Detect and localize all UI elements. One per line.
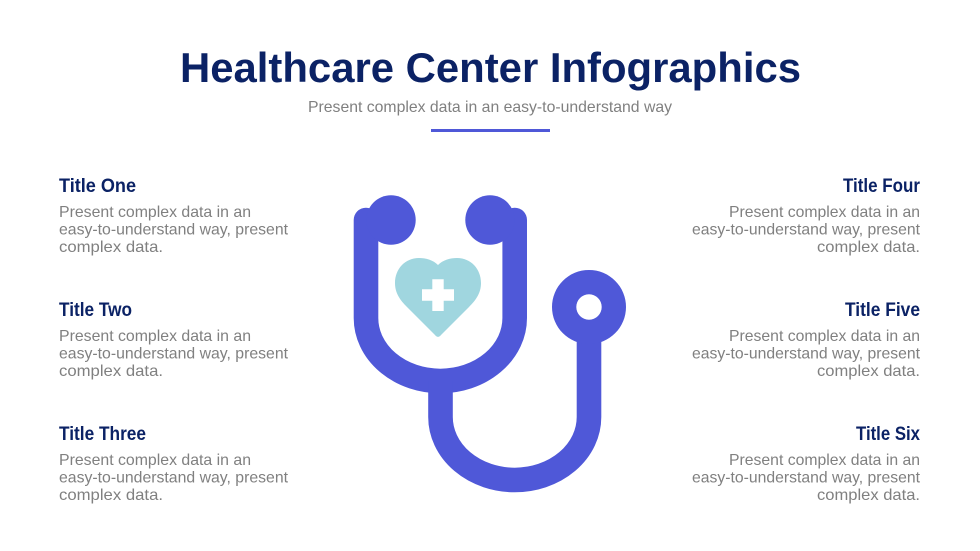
text block: Title Two: Present complex data in an [59, 328, 251, 345]
text block: Title Three: complex data. [59, 487, 163, 504]
icon: heart with cross [395, 258, 481, 337]
text block: Title Two: complex data. [59, 363, 163, 380]
chest piece [552, 270, 626, 344]
text block: Title Six: complex data. [817, 487, 920, 504]
text block: Title One: complex data. [59, 239, 163, 256]
text block: Title Four: Present complex data in an [729, 204, 920, 221]
right ear tip [465, 195, 515, 245]
text block: Title Five [692, 300, 921, 380]
text block: Title Three: Present complex data in an [59, 452, 251, 469]
text block: Title Six: Title Six [856, 424, 920, 445]
text block: Title Three [59, 424, 289, 504]
headset tube [366, 220, 515, 381]
text block: Title Five: Present complex data in an [729, 328, 920, 345]
text block: Title Six [692, 424, 921, 504]
text block: Title Two: Title Two [59, 300, 132, 321]
title underline [431, 129, 550, 132]
text block: Title One: Present complex data in an [59, 204, 251, 221]
text block: Title Four [692, 176, 921, 256]
text block: Title Three: Title Three [59, 424, 146, 445]
text block: Title Six: Present complex data in an [729, 452, 920, 469]
text block: Title Four: complex data. [817, 239, 920, 256]
text block: Title One: Title One [59, 176, 136, 197]
icon: stethoscope [366, 195, 626, 480]
text block: Title Four: Title Four [843, 176, 921, 197]
text block: Title Two [59, 300, 289, 380]
text block: Title Four: easy-to-understand way, present [692, 222, 921, 238]
text block: Title One [59, 176, 289, 256]
text block: Title Five: complex data. [817, 363, 920, 380]
subtitle: Present complex data in an easy-to-understand way [308, 99, 672, 116]
lower tube [440, 335, 589, 480]
left ear tip [366, 195, 416, 245]
title: Healthcare Center Infographics [180, 44, 801, 91]
text block: Title Five: Title Five [845, 300, 920, 321]
text block: Title Five: easy-to-understand way, present [692, 346, 921, 362]
text block: Title Two: easy-to-understand way, present [59, 346, 289, 362]
text block: Title Six: easy-to-understand way, present [692, 470, 921, 486]
text block: Title One: easy-to-understand way, present [59, 222, 289, 238]
text block: Title Three: easy-to-understand way, present [59, 470, 289, 486]
